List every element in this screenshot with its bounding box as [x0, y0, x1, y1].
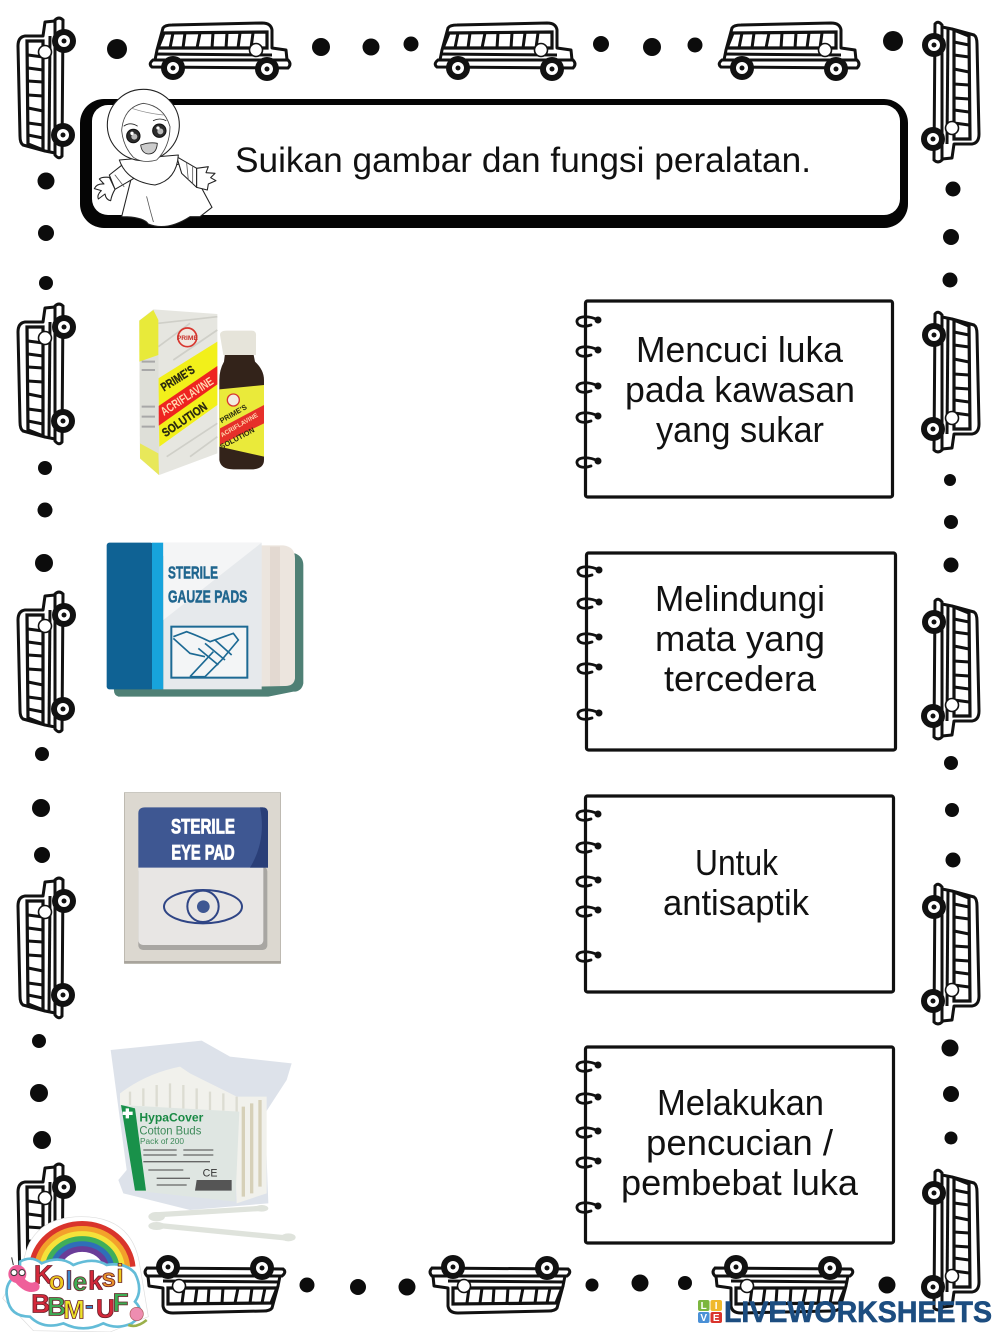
- title: Suikan gambar dan fungsi peralatan.: [235, 141, 811, 180]
- item image: acriflavine solution box and bottle: SOLUTION: [159, 399, 210, 440]
- card text: [621, 1082, 859, 1203]
- card text: Melakukan: [657, 1082, 824, 1123]
- logo: Koleksi BBM-UF rainbow: U: [96, 1293, 115, 1323]
- item image: acriflavine solution box and bottle: SOLUTION: [218, 425, 256, 451]
- card text: pada kawasan: [625, 369, 855, 410]
- logo: Koleksi BBM-UF rainbow: M: [63, 1295, 85, 1325]
- icon: LIVE tiles: I: [715, 1301, 718, 1312]
- icon: LIVE tiles: E: [713, 1313, 720, 1324]
- border: right column of buses: [921, 22, 979, 1310]
- watermark: LIVEWORKSHEETS logo: [698, 1296, 992, 1329]
- header banner: [80, 99, 908, 228]
- card text: pembebat luka: [621, 1162, 859, 1203]
- item image: acriflavine solution box and bottle: [139, 309, 264, 475]
- logo: Koleksi BBM-UF rainbow: B: [31, 1289, 50, 1319]
- item image: acriflavine solution box and bottle: PRIME: [177, 335, 198, 342]
- logo: Koleksi BBM-UF rainbow: l: [65, 1265, 73, 1295]
- card binding rings: [577, 316, 602, 467]
- logo: Koleksi BBM-UF rainbow: [3, 1217, 148, 1332]
- logo: Koleksi BBM-UF rainbow: s: [101, 1263, 116, 1293]
- item image: HypaCover cotton buds: CE: [203, 1168, 217, 1180]
- card text: Mencuci luka: [636, 329, 844, 370]
- card binding rings: [578, 566, 602, 719]
- item image: HypaCover cotton buds: HypaCover: [139, 1110, 204, 1124]
- item image: sterile eye pad: EYE PAD: [171, 840, 235, 864]
- logo: Koleksi BBM-UF rainbow: B: [47, 1291, 66, 1321]
- item image: HypaCover cotton buds: [111, 1041, 296, 1241]
- item image: sterile gauze pads: STERILE: [168, 563, 218, 583]
- item image: acriflavine solution box and bottle: ACRIFLAVINE: [158, 374, 216, 419]
- card: Melakukan pencucian: [577, 1047, 894, 1243]
- card: Untuk antisaptik: [577, 796, 894, 992]
- card text: [663, 842, 810, 923]
- icon: LIVE tiles: V: [700, 1313, 707, 1324]
- logo: Koleksi BBM-UF rainbow: K: [34, 1259, 53, 1289]
- icon: LIVE tiles: [698, 1300, 722, 1324]
- card text: mata yang: [655, 618, 825, 659]
- item image: acriflavine solution box and bottle: ACRIFLAVINE: [219, 412, 259, 439]
- item image: HypaCover cotton buds: Cotton Buds: [139, 1125, 201, 1138]
- item image: sterile gauze pads: [107, 543, 303, 697]
- logo: Koleksi BBM-UF rainbow: F: [113, 1287, 129, 1317]
- card text: Untuk: [695, 842, 779, 883]
- item image: HypaCover cotton buds: Pack of 200: [140, 1136, 184, 1146]
- logo: Koleksi BBM-UF rainbow: -: [85, 1289, 94, 1319]
- icon: LIVE tiles: L: [701, 1301, 707, 1312]
- card binding rings: [577, 810, 602, 961]
- card text: tercedera: [664, 658, 817, 699]
- card text: [655, 578, 825, 699]
- border: top row of buses: [150, 23, 859, 81]
- watermark text: LIVEWORKSHEETS: [724, 1296, 992, 1329]
- card text: yang sukar: [656, 409, 824, 450]
- card binding rings: [577, 1062, 602, 1212]
- logo: Koleksi BBM-UF rainbow: o: [49, 1265, 65, 1295]
- card: Melindungi mata: [578, 553, 896, 750]
- border: left column of buses: [18, 18, 76, 1304]
- item image: sterile eye pad: STERILE: [171, 814, 235, 838]
- item image: acriflavine solution box and bottle: PRIME'S: [218, 402, 249, 425]
- logo: Koleksi BBM-UF rainbow: e: [73, 1267, 87, 1297]
- card text: pencucian /: [646, 1122, 833, 1163]
- card text: Melindungi: [655, 578, 825, 619]
- card text: antisaptik: [663, 882, 810, 923]
- item image: sterile eye pad: [124, 793, 281, 964]
- item image: acriflavine solution box and bottle: PRIME'S: [158, 363, 197, 394]
- icon: girl in hijab: [94, 89, 216, 227]
- card: Mencuci luka: [577, 301, 892, 497]
- card text: [625, 329, 855, 450]
- icon: pink worm: [8, 1257, 35, 1287]
- logo: Koleksi BBM-UF rainbow: k: [88, 1265, 103, 1295]
- icon: pink snail: [128, 1307, 147, 1326]
- border: bottom row of buses: [145, 1255, 853, 1313]
- item image: sterile gauze pads: GAUZE PADS: [168, 587, 247, 607]
- logo: Koleksi BBM-UF rainbow: i: [116, 1259, 124, 1289]
